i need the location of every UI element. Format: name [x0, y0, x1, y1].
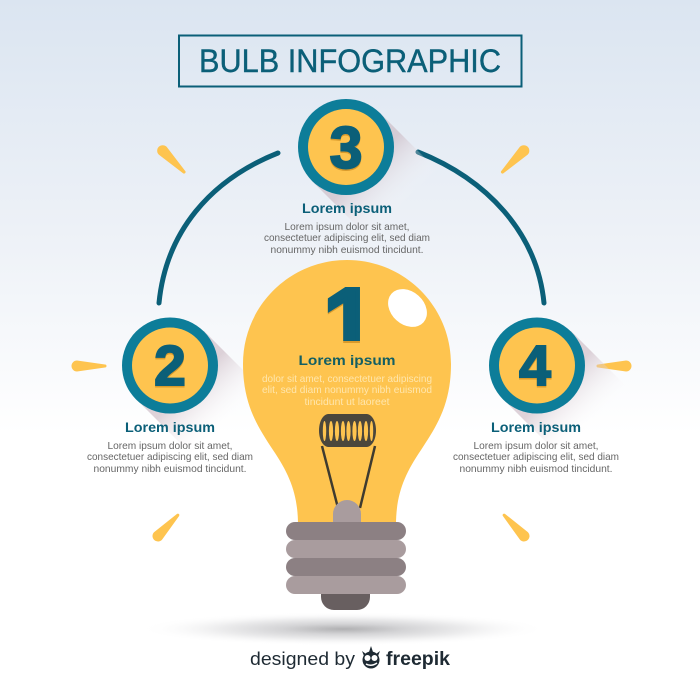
heading and text 2	[87, 419, 253, 475]
bulb text: dolor sit amet, consectetuer adipiscing	[262, 373, 432, 385]
heading and text 3	[264, 200, 430, 256]
bulb text	[262, 373, 432, 408]
badge 4	[489, 318, 629, 457]
ray bottom right	[503, 514, 530, 542]
title: BULB INFOGRAPHIC	[199, 43, 501, 79]
heading and text 2: consectetuer adipiscing elit, sed diam	[87, 451, 253, 463]
ray right	[596, 360, 632, 372]
bulb text: tincidunt ut laoreet	[304, 396, 390, 408]
badge 3	[298, 99, 438, 239]
arc right	[418, 152, 544, 303]
ray left	[72, 360, 106, 372]
bulb glass	[243, 260, 451, 525]
floor shadow	[138, 612, 548, 646]
title	[179, 36, 522, 86]
heading and text 3: Lorem ipsum	[302, 200, 392, 216]
heading and text 4: Lorem ipsum dolor sit amet,	[474, 440, 598, 452]
heading and text 4: consectetuer adipiscing elit, sed diam	[453, 451, 619, 463]
bottom cap	[321, 592, 370, 610]
badge 4: 4	[519, 336, 551, 400]
bulb text: elit, sed diam nonummy nibh euismod	[262, 384, 432, 396]
heading and text 4	[453, 419, 619, 475]
ray top right	[501, 145, 529, 174]
badge 4: 4	[519, 334, 551, 398]
heading and text 3: nonummy nibh euismod tincidunt.	[270, 244, 424, 256]
lamp stem	[333, 500, 361, 523]
arc left	[159, 153, 278, 303]
highlight	[380, 281, 435, 335]
heading and text 2: Lorem ipsum dolor sit amet,	[108, 440, 232, 452]
badge 3: 3	[330, 116, 362, 182]
badge 2: 2	[154, 334, 186, 398]
heading and text 3: Lorem ipsum dolor sit amet,	[284, 221, 410, 233]
bulb heading: Lorem ipsum	[298, 352, 396, 368]
heading and text 4: Lorem ipsum	[491, 419, 581, 435]
credit: freepik	[386, 649, 450, 670]
ray top left	[157, 145, 186, 174]
icon: freepik logo	[362, 646, 380, 668]
number 1: 1	[324, 270, 375, 374]
number 1: 1	[324, 269, 375, 373]
filament	[319, 414, 376, 508]
screw threads	[286, 522, 406, 594]
light bulb	[243, 260, 451, 610]
number 1	[328, 287, 360, 343]
heading and text 4: nonummy nibh euismod tincidunt.	[460, 463, 612, 475]
heading and text 2: nonummy nibh euismod tincidunt.	[94, 463, 246, 475]
credit	[250, 646, 450, 670]
heading and text 3: consectetuer adipiscing elit, sed diam	[264, 232, 430, 244]
ray bottom left	[152, 514, 179, 542]
heading and text 2: Lorem ipsum	[125, 419, 215, 435]
credit: designed by	[250, 649, 355, 669]
badge 2	[122, 318, 262, 457]
badge 2: 2	[154, 336, 186, 400]
badge 3: 3	[330, 115, 362, 181]
